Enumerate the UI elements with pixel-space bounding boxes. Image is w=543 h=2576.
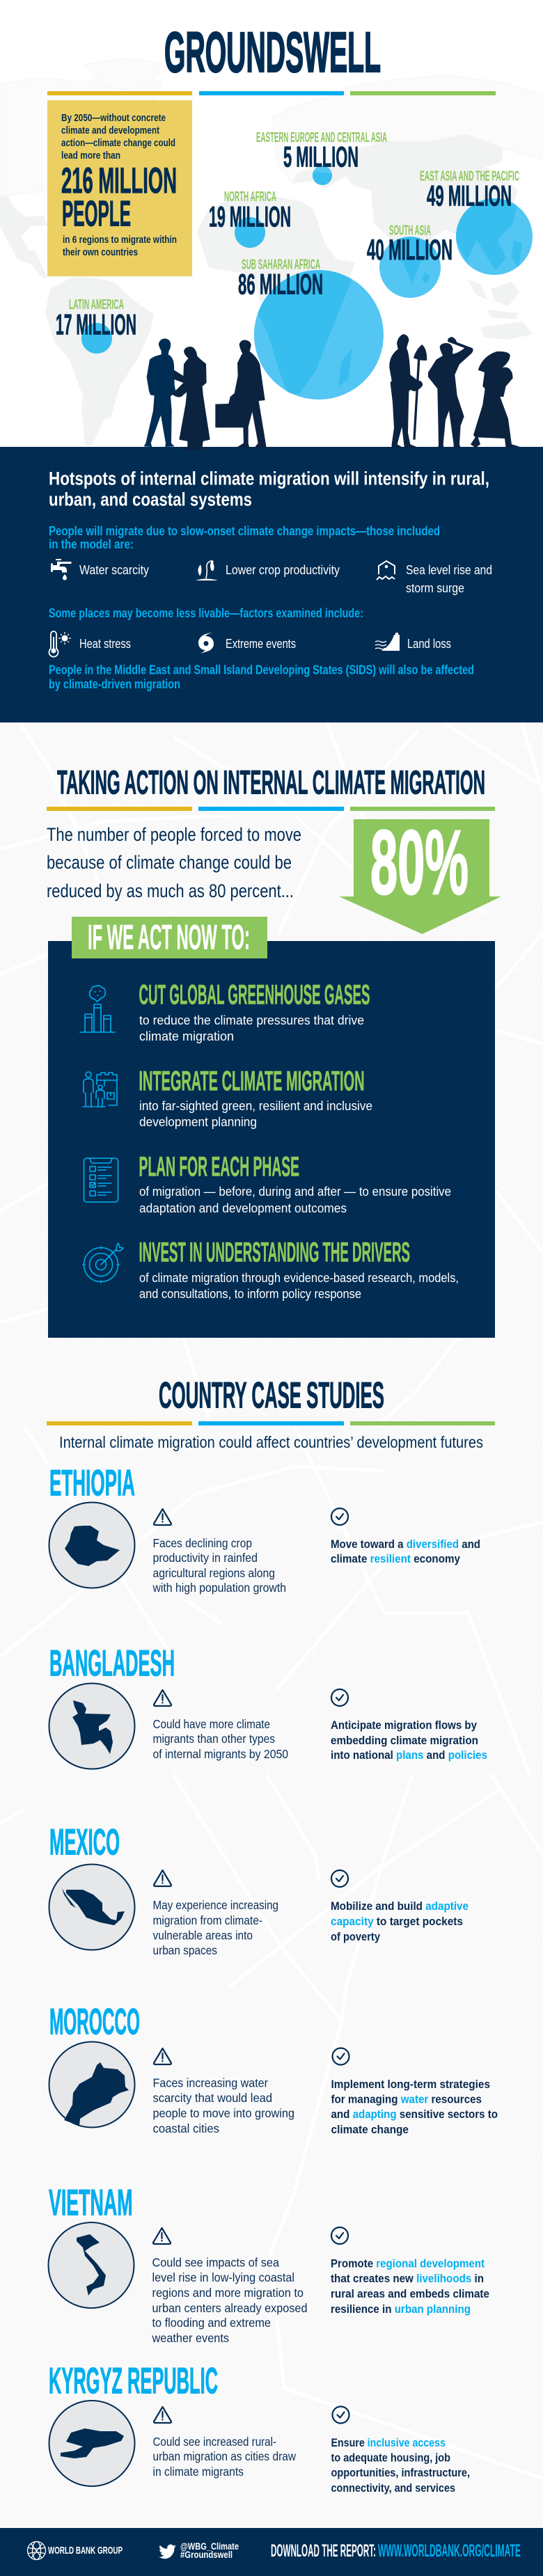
label: lower crop productivity: Lower crop productivity	[226, 563, 340, 577]
country map	[49, 1864, 135, 1950]
label: South Asia	[367, 223, 452, 266]
response text: Ensure inclusive access	[331, 2436, 446, 2449]
callout intro text: lead more than	[61, 150, 120, 161]
response text: Implement long-term strategies	[331, 2078, 490, 2091]
label: land loss: Land loss	[407, 637, 451, 651]
label: extreme events: Extreme events	[226, 637, 296, 651]
icon: factory stacks and cloud	[80, 986, 115, 1032]
case: Kyrgyz Republic	[49, 2361, 470, 2495]
social handles: #Groundswell	[180, 2549, 233, 2560]
impact text: productivity in rainfed	[153, 1551, 258, 1565]
response text: that creates new livelihoods in	[331, 2272, 484, 2285]
subheading: slow-onset impacts: in the model are:	[49, 537, 134, 551]
impact text: of internal migrants by 2050	[153, 1747, 288, 1761]
arrow: 80 percent down	[339, 811, 501, 934]
map bubbles	[70, 166, 533, 400]
response text	[331, 1899, 469, 1943]
icon: hurricane	[198, 633, 214, 654]
subheading: less livable: Some places may become less livable—factors examined include:	[49, 606, 363, 620]
response text: Mobilize and build adaptive	[331, 1899, 469, 1913]
icon: water tap	[51, 559, 71, 580]
country map	[49, 2401, 135, 2486]
callout intro text: action—climate change could	[61, 137, 175, 149]
color bars: case studies	[47, 1421, 495, 1425]
case: Morocco: MOROCCO	[49, 2002, 140, 2042]
big number: 216 million people: PEOPLE	[62, 193, 131, 234]
case: Kyrgyz Republic: KYRGYZ REPUBLIC	[49, 2361, 218, 2401]
response text	[331, 2257, 489, 2316]
icon: land loss	[375, 633, 400, 651]
impact text: urban centers already exposed	[152, 2301, 308, 2315]
download call to action: DOWNLOAD THE REPORT:	[271, 2541, 376, 2561]
response text: opportunities, infrastructure,	[331, 2466, 470, 2479]
country map	[49, 1502, 135, 1588]
action 1: cut global greenhouse gases: to reduce the climate pressures that drive	[139, 1013, 364, 1027]
callout closing text: their own countries	[63, 246, 138, 258]
response text: and adapting sensitive sectors to	[331, 2108, 498, 2121]
impact text: migration from climate-	[153, 1913, 262, 1927]
action 3: plan for each phase: adaptation and development outcomes	[139, 1201, 347, 1215]
color bars: taking action	[47, 807, 495, 811]
impact text	[152, 2255, 308, 2345]
label: South Asia: 40 MILLION	[367, 233, 452, 266]
response text: resilience in urban planning	[331, 2302, 471, 2316]
impact text: to flooding and extreme	[152, 2316, 271, 2330]
label: East Asia and the Pacific	[420, 168, 519, 212]
response text: Move toward a diversified and	[331, 1538, 480, 1551]
icon: check	[333, 2048, 349, 2064]
action 4: invest in understanding the drivers: and consultations, to inform policy response	[139, 1287, 361, 1301]
icon: wilting plant	[196, 560, 218, 580]
case: Mexico: MEXICO	[49, 1822, 120, 1863]
note: Middle East and SIDS	[49, 663, 474, 691]
label: North Africa	[209, 189, 291, 233]
subtitle: case studies: Internal climate migration could affect countries’ development futures	[59, 1433, 483, 1451]
impact text: regions and more migration to	[152, 2286, 304, 2300]
text: 80 percent reduction: reduced by as much as 80 percent...	[47, 880, 294, 901]
impact text: vulnerable areas into	[153, 1928, 253, 1942]
label: heat stress: Heat stress	[79, 637, 131, 651]
impact text: in climate migrants	[153, 2465, 244, 2479]
icon: check	[331, 2227, 348, 2244]
case: Mexico	[49, 1822, 469, 1957]
impact text	[153, 1898, 278, 1957]
response text: into national plans and policies	[331, 1748, 487, 1762]
impact text: Faces declining crop	[153, 1536, 252, 1550]
logo text: World Bank Group: WORLD BANK GROUP	[48, 2545, 123, 2557]
icon: twitter bird	[159, 2545, 176, 2559]
case: Ethiopia	[49, 1463, 480, 1595]
action 4: invest in understanding the drivers	[139, 1238, 459, 1301]
icon: thermometer and sun	[49, 631, 71, 657]
icon: warning	[154, 2048, 171, 2064]
people silhouettes: couple and businessman	[144, 338, 267, 450]
background: faint world map	[0, 58, 543, 445]
label: Latin America	[56, 297, 136, 341]
response text: connectivity, and services	[331, 2481, 455, 2495]
callout intro text: By 2050—without concrete	[61, 112, 166, 124]
response text	[331, 2078, 498, 2136]
response text: for managing water resources	[331, 2092, 482, 2106]
icon: check	[331, 1870, 348, 1887]
text: EASTERN EUROPE AND CENTRAL ASIA	[256, 129, 387, 145]
icon: warning	[154, 1509, 171, 1525]
case: Morocco	[49, 2002, 498, 2136]
icon: warning	[153, 2228, 171, 2244]
icon: check	[331, 1508, 348, 1525]
action 2: integrate climate migration: development planning	[139, 1115, 257, 1129]
panel: if we act now	[48, 917, 495, 1338]
label: sea level rise and storm surge: Sea level rise and	[406, 563, 492, 577]
impact text: people to move into growing	[153, 2106, 294, 2120]
response text: to adequate housing, job	[331, 2451, 450, 2464]
panel: 216 million callout	[47, 100, 192, 276]
response text: climate change	[331, 2123, 409, 2136]
action 1: cut global greenhouse gases: climate migration	[139, 1029, 234, 1043]
label: sea level rise and storm surge	[406, 563, 492, 595]
action 3: plan for each phase: PLAN FOR EACH PHASE	[139, 1152, 299, 1183]
social handles: @WBG_Climate	[180, 2541, 239, 2552]
label: Eastern Europe and Central Asia: 5 MILLION	[283, 141, 359, 173]
text: 80 percent reduction	[47, 824, 301, 901]
label: North Africa: 19 MILLION	[209, 200, 291, 233]
callout intro text: climate and development	[61, 125, 159, 136]
country map	[49, 2042, 135, 2127]
panel: hotspots	[0, 447, 543, 722]
impact text: with high population growth	[152, 1581, 286, 1595]
impact text	[152, 1536, 286, 1595]
response text: rural areas and embeds climate	[331, 2287, 489, 2300]
subheading: slow-onset impacts	[49, 523, 440, 551]
case: Bangladesh	[49, 1643, 487, 1769]
banner: if we act now to	[72, 917, 267, 958]
response text: of poverty	[331, 1930, 380, 1943]
action 2: integrate climate migration	[139, 1066, 372, 1129]
impact text: weather events	[152, 2331, 229, 2345]
icon: flooded house	[377, 561, 395, 580]
social handles	[180, 2541, 239, 2560]
impact text: Faces increasing water	[153, 2076, 268, 2089]
impact text: coastal cities	[153, 2121, 219, 2135]
icon: target and arrow	[83, 1243, 123, 1283]
label: sea level rise and storm surge: storm surge	[406, 581, 464, 595]
callout closing text	[63, 234, 177, 258]
heading: hotspots	[49, 468, 489, 510]
icon: check	[331, 1689, 348, 1706]
response text: embedding climate migration	[331, 1734, 478, 1747]
heading: hotspots: urban, and coastal systems	[49, 489, 252, 510]
impact text: May experience increasing	[153, 1898, 278, 1912]
callout intro text	[61, 112, 175, 161]
case: Ethiopia: ETHIOPIA	[49, 1463, 135, 1503]
impact text: level rise in low-lying coastal	[152, 2270, 294, 2284]
icon: warning	[154, 1870, 171, 1886]
icon: warning	[154, 1690, 171, 1706]
background: street map pattern	[0, 722, 543, 2528]
text: 80 percent reduction: because of climate change could be	[47, 852, 292, 873]
icon: family and shelter	[83, 1072, 117, 1107]
response text	[331, 1538, 480, 1565]
impact text: urban spaces	[153, 1943, 217, 1957]
impact text: Could see impacts of sea	[152, 2255, 279, 2269]
impact text: migrants than other types	[153, 1732, 275, 1746]
impact text	[153, 2435, 296, 2479]
icon: World Bank globe	[28, 2542, 46, 2560]
case: Vietnam	[49, 2183, 489, 2345]
label: Eastern Europe and Central Asia	[256, 129, 387, 173]
action 1: cut global greenhouse gases	[139, 980, 370, 1043]
response text	[331, 2436, 470, 2495]
case: Bangladesh: BANGLADESH	[49, 1643, 175, 1684]
icon: warning	[154, 2407, 171, 2423]
label: North Africa: NORTH AFRICA	[224, 189, 276, 205]
action 2: integrate climate migration: into far-sighted green, resilient and inclusive	[139, 1099, 372, 1113]
people silhouettes: farmer, worker, woman with child	[389, 334, 520, 449]
response text: Promote regional development	[331, 2257, 485, 2270]
impact text: Could see increased rural-	[153, 2435, 276, 2449]
label: Sub Saharan Africa: SUB SAHARAN AFRICA	[242, 256, 320, 273]
response text	[331, 1718, 487, 1762]
callout closing text: in 6 regions to migrate within	[63, 234, 177, 246]
response text: capacity to target pockets	[331, 1915, 463, 1928]
label: Sub Saharan Africa: 86 MILLION	[238, 268, 323, 301]
icon: checklist clipboard	[84, 1158, 118, 1202]
impact text: scarcity that would lead	[153, 2091, 272, 2105]
color bars: top	[47, 91, 496, 95]
action 3: plan for each phase	[139, 1152, 451, 1215]
impact text	[153, 2076, 294, 2135]
response text: Anticipate migration flows by	[331, 1718, 477, 1732]
impact text: agricultural regions along	[153, 1566, 275, 1580]
country name: VIETNAM	[49, 2183, 132, 2223]
impact text: Could have more climate	[153, 1717, 270, 1731]
label: Sub Saharan Africa	[238, 256, 323, 301]
big number: 216 million people	[61, 161, 177, 234]
action 4: invest in understanding the drivers: of climate migration through evidence-based research, models,	[139, 1271, 459, 1285]
country map	[49, 1683, 135, 1769]
text: 80 percent reduction: The number of people forced to move	[47, 824, 301, 845]
response text: climate resilient economy	[331, 1552, 460, 1565]
subheading: slow-onset impacts: People will migrate due to slow-onset climate change impacts—those included	[49, 523, 440, 538]
label: Latin America: 17 MILLION	[56, 308, 136, 341]
banner: if we act now to: IF WE ACT NOW TO:	[88, 918, 250, 957]
label: South Asia: SOUTH ASIA	[389, 223, 431, 238]
label: water scarcity: Water scarcity	[79, 563, 149, 577]
country map	[49, 2222, 134, 2308]
action 3: plan for each phase: of migration — before, during and after — to ensure positive	[139, 1185, 451, 1199]
icon: check	[333, 2407, 349, 2424]
note: Middle East and SIDS: by climate-driven migration	[49, 677, 180, 691]
label: Latin America: LATIN AMERICA	[69, 297, 124, 313]
impact text: urban migration as cities draw	[153, 2449, 296, 2463]
footer	[0, 2528, 543, 2576]
big number: 216 million people: 216 MILLION	[61, 161, 177, 201]
impact text	[153, 1717, 288, 1761]
